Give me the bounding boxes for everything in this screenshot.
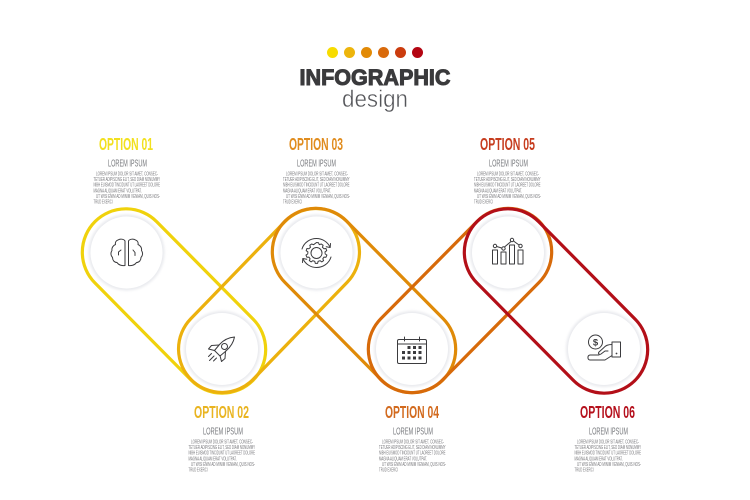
option 03 text: TRUD EXERCI xyxy=(283,200,302,206)
option 02 text: MAGNA ALIQUAM ERAT VOLUTPAT. xyxy=(188,456,236,462)
title xyxy=(300,65,451,113)
option 04 text: LOREM IPSUM xyxy=(393,426,433,438)
option 05 text: MAGNA ALIQUAM ERAT VOLUTPAT. xyxy=(474,188,522,194)
option 03 text xyxy=(283,134,350,206)
title: INFOGRAPHIC xyxy=(300,65,451,90)
option 04 text: TETUER ADIPISCING ELIT, SED DIAM NONUMMY xyxy=(379,445,446,451)
option 06 text: TRUD EXERCI xyxy=(574,468,594,474)
option 01 text: OPTION 01 xyxy=(99,134,153,154)
option 05 text: UT WISI ENIM AD MINIM VENIAM, QUIS NOS- xyxy=(477,194,541,200)
option 04 text xyxy=(379,402,446,474)
option 03 text: NIBH EUISMOD TINCIDUNT UT LAOREET DOLORE xyxy=(283,183,350,189)
option 06 text: OPTION 06 xyxy=(580,402,635,422)
option 02 text: TETUER ADIPISCING ELIT, SED DIAM NONUMMY xyxy=(188,445,255,451)
option 03 text: TETUER ADIPISCING ELIT, SED DIAM NONUMMY xyxy=(283,177,350,183)
icon: hand with coin: $ xyxy=(593,338,599,348)
white disc 6 xyxy=(566,311,642,387)
option 02 text xyxy=(188,402,255,474)
option 01 text: UT WISI ENIM AD MINIM VENIAM, QUIS NOS- xyxy=(96,194,160,200)
option 04 text: OPTION 04 xyxy=(385,402,439,422)
option 05 text: TRUD EXERCI xyxy=(474,200,493,206)
option 05 text xyxy=(474,134,541,206)
option 06 text: TETUER ADIPISCING ELIT, SED DIAM NONUMMY xyxy=(574,445,641,451)
option 05 text: LOREM IPSUM xyxy=(489,158,528,170)
colour dots xyxy=(327,47,423,58)
connected pill outlines xyxy=(64,190,666,411)
option 03 text: LOREM IPSUM xyxy=(297,158,336,170)
icon: hand with coin xyxy=(588,335,620,360)
option 03 text: MAGNA ALIQUAM ERAT VOLUTPAT. xyxy=(283,188,331,194)
white disc 5 xyxy=(470,214,546,290)
option 05 text: OPTION 05 xyxy=(480,134,535,154)
white disc 2 xyxy=(184,311,260,387)
option 04 text: LOREM IPSUM DOLOR SIT AMET, CONSEC- xyxy=(382,440,444,446)
white disc 3 xyxy=(278,214,354,290)
option 05 text: LOREM IPSUM DOLOR SIT AMET, CONSEC- xyxy=(477,172,539,178)
option 02 text: NIBH EUISMOD TINCIDUNT UT LAOREET DOLORE xyxy=(188,451,255,457)
icon: brain xyxy=(111,239,143,266)
icon: bar chart with trend xyxy=(492,238,523,264)
option 06 text: UT WISI ENIM AD MINIM VENIAM, QUIS NOS- xyxy=(577,462,641,468)
option 05 text: TETUER ADIPISCING ELIT, SED DIAM NONUMMY xyxy=(474,177,541,183)
option 03 text: OPTION 03 xyxy=(289,134,343,154)
option 02 text: OPTION 02 xyxy=(194,402,249,422)
option 06 text: LOREM IPSUM xyxy=(589,426,628,438)
option 01 text: TRUD EXERCI xyxy=(94,200,112,206)
option 01 text xyxy=(94,134,160,206)
option 06 text xyxy=(574,402,641,474)
option 06 text: MAGNA ALIQUAM ERAT VOLUTPAT. xyxy=(574,456,622,462)
option 02 text: LOREM IPSUM DOLOR SIT AMET, CONSEC- xyxy=(191,440,253,446)
option 04 text: NIBH EUISMOD TINCIDUNT UT LAOREET DOLORE xyxy=(379,451,446,457)
icon: rocket xyxy=(208,337,234,362)
option 05 text: NIBH EUISMOD TINCIDUNT UT LAOREET DOLORE xyxy=(474,183,541,189)
white disc 4 xyxy=(374,311,450,387)
option 04 text: MAGNA ALIQUAM ERAT VOLUTPAT. xyxy=(379,456,427,462)
option 03 text: UT WISI ENIM AD MINIM VENIAM, QUIS NOS- xyxy=(286,194,350,200)
title: design xyxy=(342,86,408,113)
white disc 1 xyxy=(88,214,164,290)
icon: calendar xyxy=(398,337,426,364)
option 01 text: LOREM IPSUM DOLOR SIT AMET, CONSEC- xyxy=(96,172,158,178)
option 04 text: UT WISI ENIM AD MINIM VENIAM, QUIS NOS- xyxy=(382,462,446,468)
option 01 text: NIBH EUISMOD TINCIDUNT UT LAOREET DOLORE xyxy=(94,183,160,189)
option 06 text: NIBH EUISMOD TINCIDUNT UT LAOREET DOLORE xyxy=(574,451,641,457)
option 03 text: LOREM IPSUM DOLOR SIT AMET, CONSEC- xyxy=(286,172,348,178)
option 01 text: TETUER ADIPISCING ELIT, SED DIAM NONUMMY xyxy=(94,177,160,183)
icon: rotating gear xyxy=(302,238,331,268)
option 01 text: LOREM IPSUM xyxy=(108,158,147,170)
option 02 text: LOREM IPSUM xyxy=(203,426,243,438)
option 02 text: UT WISI ENIM AD MINIM VENIAM, QUIS NOS- xyxy=(191,462,255,468)
option 02 text: TRUD EXERCI xyxy=(188,468,208,474)
option 06 text: LOREM IPSUM DOLOR SIT AMET, CONSEC- xyxy=(577,440,639,446)
option 01 text: MAGNA ALIQUAM ERAT VOLUTPAT. xyxy=(94,188,142,194)
option 04 text: TRUD EXERCI xyxy=(379,468,398,474)
